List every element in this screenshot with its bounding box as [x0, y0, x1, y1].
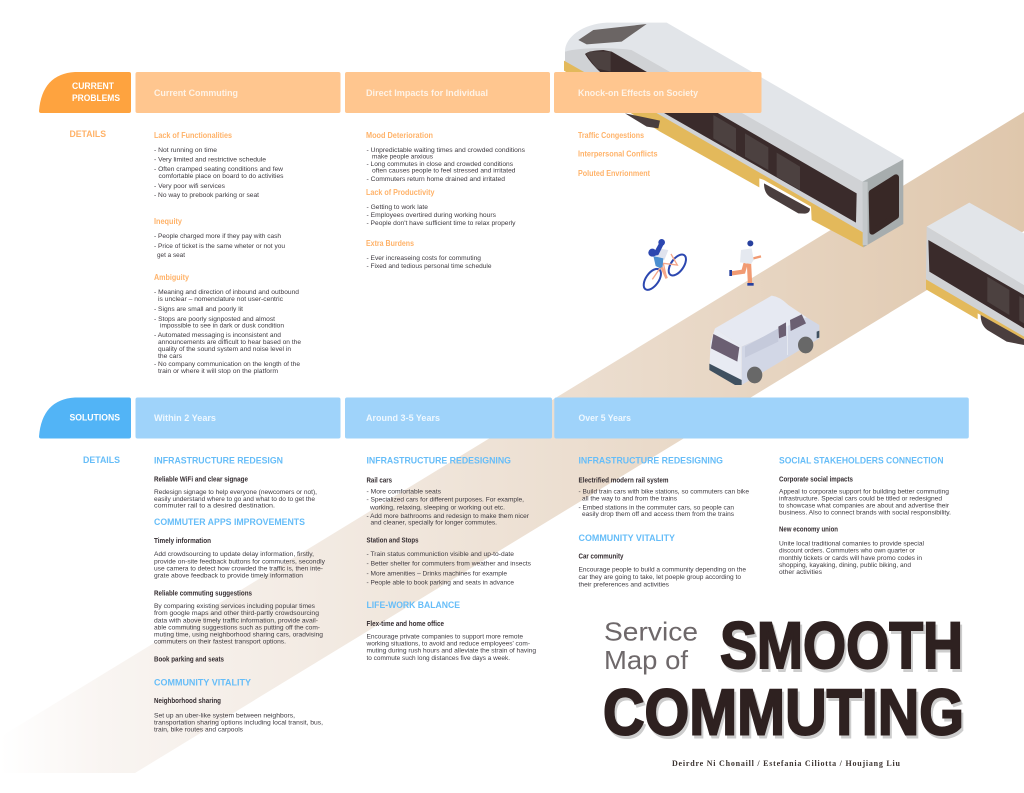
text block: around 3-5 years: - Add more bathrooms and redesign to make them nicer — [366, 513, 530, 520]
text block: within 2 years: Timely information — [154, 537, 211, 545]
text block: within 2 years: train, bike routes and carpools — [154, 727, 244, 734]
text block: current commuting details: get a seat — [157, 252, 185, 259]
text block: knock-on effects details: Poluted Envrionment — [578, 168, 650, 178]
label: details (solutions): DETAILS — [83, 455, 121, 466]
text block: within 2 years: grate above feedback to provide timely information — [154, 573, 303, 580]
text block: over 5 years, first column: their preferences and activities — [578, 581, 670, 588]
text block: over 5 years, second column: monthly tickets or cards will have promo codes in — [779, 555, 922, 562]
text block: direct impacts details: - Ever increaseing costs for commuting — [366, 255, 481, 262]
text block: over 5 years, first column: car they are going to take, let poeple group according to — [578, 574, 741, 581]
box: direct impacts: Direct Impacts for Individual — [366, 88, 488, 99]
text block: within 2 years: commuter rail to a desired destination. — [154, 503, 275, 510]
illustration: van — [709, 296, 819, 385]
text block: current commuting details: Ambiguity — [154, 272, 189, 282]
text block: around 3-5 years: Flex-time and home office — [366, 620, 444, 628]
text block: within 2 years: INFRASTRUCTURE REDESIGN — [154, 456, 283, 466]
text block: direct impacts details: Extra Burdens — [366, 238, 414, 248]
text block: within 2 years: data with above timely traffic information, provide avail- — [154, 617, 318, 624]
text block: within 2 years: By comparing existing services including popular times — [154, 603, 316, 610]
text block: current commuting details: - No company communication on the length of the — [154, 361, 300, 368]
box: within 2 years: Within 2 Years — [154, 413, 216, 424]
text block: direct impacts details: - Commuters return home drained and irritated — [366, 176, 505, 183]
box: around 3-5 years — [345, 398, 552, 438]
text block: current commuting details: - Very limited and restrictive schedule — [154, 156, 266, 164]
text block: current commuting details: - Often cramped seating conditions and few — [154, 166, 283, 173]
text block: within 2 years: able commuting suggestions such as putting off the com- — [154, 624, 320, 631]
text block: around 3-5 years: - Specialized cars for different purposes. For example, — [366, 497, 524, 504]
title: Service — [604, 617, 698, 647]
text block: direct impacts details: - Employees overtired during working hours — [366, 212, 497, 219]
text block: around 3-5 years: Encourage private companies to support more remote — [366, 634, 523, 641]
title: COMMUTING — [605, 678, 966, 752]
text block: current commuting details: - Stops are poorly signposted and almost — [154, 316, 275, 323]
text block: over 5 years, second column: to showcase what companies are about and advertise their — [779, 503, 950, 510]
text block: current commuting details: comfortable place on board to do activities — [158, 173, 284, 180]
text block: direct impacts details: often causes people to feel stressed and irritated — [372, 168, 516, 175]
text block: current commuting details: quality of the sound system and noise level in — [158, 346, 291, 353]
text block: over 5 years, first column — [578, 456, 749, 588]
text block: around 3-5 years: Station and Stops — [366, 536, 419, 544]
text block: direct impacts details: - Getting to work late — [366, 204, 428, 211]
text block: over 5 years, first column: Encourage people to build a community depending on the — [578, 567, 746, 574]
text block: within 2 years: COMMUNITY VITALITY — [154, 678, 252, 689]
box: direct impacts — [345, 72, 550, 113]
text block: within 2 years: easily understand where to go and what to do to get the — [154, 496, 315, 503]
text block: current commuting details: - People charged more if they pay with cash — [154, 233, 281, 240]
title: SMOOTH — [722, 611, 965, 685]
text block: within 2 years: COMMUTER APPS IMPROVEMENTS — [154, 517, 306, 528]
text block: knock-on effects details: Traffic Congestions — [578, 130, 644, 140]
text block: current commuting details: train or where it will stop on the platform — [158, 368, 278, 375]
text block: within 2 years: from google maps and other third-partly crowdsourcing — [154, 610, 319, 617]
text block: over 5 years, second column: discount orders. Commuters who own quarter or — [779, 548, 916, 555]
text block: around 3-5 years: working, relaxing, sleeping or working out etc. — [369, 504, 505, 511]
text block: current commuting details: - No way to prebook parking or seat — [154, 192, 259, 199]
box: current commuting — [136, 72, 340, 113]
tab: current problems: CURRENT — [72, 81, 114, 92]
title: COMMUTING — [603, 676, 964, 748]
text block: within 2 years: Redesign signage to help everyone (newcomers or not), — [154, 489, 317, 496]
tab: solutions: SOLUTIONS — [70, 413, 121, 424]
text block: current commuting details: the cars — [158, 353, 183, 360]
text block: over 5 years, second column: other activities — [779, 569, 823, 576]
box: within 2 years — [136, 398, 340, 438]
title: Map of — [604, 645, 689, 675]
text block: over 5 years, second column: shopping, kayaking, dining, public biking, and — [779, 562, 911, 569]
title — [603, 608, 966, 752]
text block: around 3-5 years: Rail cars — [366, 476, 392, 484]
text block: over 5 years, first column: COMMUNITY VITALITY — [578, 533, 676, 544]
text block: current commuting details: Lack of Functionalities — [154, 130, 232, 140]
text block: within 2 years: muting time, using neighborhood sharing cars, oradvising — [154, 631, 323, 638]
text block: within 2 years: use camera to detect how crowded the traffic is, then inte- — [154, 565, 323, 572]
text block: knock-on effects details — [578, 130, 658, 178]
text block: current commuting details: announcements are difficult to hear based on the — [158, 339, 301, 346]
text block: over 5 years, second column: infrastructure. Special cars could be titled or redesigned — [779, 496, 942, 503]
text block: current commuting details: impossible to see in dark or dusk condition — [160, 322, 284, 330]
text block: direct impacts details: - People don't have sufficient time to relax properly — [366, 220, 516, 227]
text block: over 5 years, second column: Unite local traditional comanies to provide special — [779, 541, 924, 548]
box: knock-on effects: Knock-on Effects on Society — [578, 88, 699, 99]
text block: over 5 years, first column: easily drop them off and access them from the trains — [582, 511, 735, 518]
text block: current commuting details: - Automated messaging is inconsistent and — [154, 332, 281, 339]
text block: over 5 years, first column: - Embed stations in the commuter cars, so people can — [578, 504, 734, 511]
text block: within 2 years: commuters on their fastest transport options. — [154, 639, 286, 646]
text block: around 3-5 years: - More amenities – Drinks machines for example — [366, 570, 507, 577]
text block: around 3-5 years: and cleaner, specially for longer commutes. — [370, 520, 497, 527]
illustration: cyclist — [640, 239, 689, 293]
text block: over 5 years, second column: New economy union — [779, 525, 838, 533]
illustration: front train — [564, 23, 903, 247]
box: around 3-5 years: Around 3-5 Years — [366, 413, 440, 424]
text block: within 2 years: provide on-site feedback buttons for commuters, secondly — [154, 558, 326, 565]
text block: current commuting details: - Not running on time — [154, 147, 217, 154]
illustration: runner — [729, 240, 761, 286]
illustration: rear train — [926, 203, 1024, 345]
text block: over 5 years, first column: all the way to and from the trains — [582, 495, 678, 502]
text block: within 2 years: Neighborhood sharing — [154, 697, 221, 705]
box: knock-on effects — [554, 72, 762, 113]
text block: within 2 years — [154, 456, 326, 734]
text block: current commuting details: - Price of ticket is the same wheter or not you — [154, 243, 285, 250]
text block: current commuting details: - Signs are small and poorly lit — [154, 306, 243, 313]
text block: over 5 years, first column: INFRASTRUCTURE REDESIGNING — [578, 456, 723, 466]
header row: current problems — [39, 72, 762, 113]
tab: solutions — [39, 398, 131, 438]
text block: within 2 years: Book parking and seats — [154, 655, 224, 663]
text block: direct impacts details — [366, 130, 526, 270]
text block: within 2 years: Reliable commuting suggestions — [154, 589, 252, 597]
text block: around 3-5 years — [366, 456, 536, 662]
title: SMOOTH — [720, 608, 963, 682]
text block: over 5 years, second column: Appeal to corporate support for building better commuting — [779, 489, 949, 496]
text block: over 5 years, second column: Corporate social impacts — [779, 476, 853, 484]
text block: over 5 years, second column: business. Also to connect brands with social responsibility. — [779, 510, 951, 517]
text block: around 3-5 years: to commute such long distances five days a week. — [366, 655, 510, 662]
box: over 5 years — [554, 398, 969, 438]
text block: over 5 years, second column — [779, 456, 951, 576]
text block: within 2 years: Add crowdsourcing to update delay information, firstly, — [154, 551, 314, 558]
box: current commuting: Current Commuting — [154, 88, 238, 99]
text block: around 3-5 years: INFRASTRUCTURE REDESIGNING — [366, 456, 511, 466]
text block: over 5 years, first column: Electrified modern rail system — [578, 476, 668, 484]
text block: current commuting details: - Meaning and direction of inbound and outbound — [154, 289, 299, 296]
text block: direct impacts details: - Long commutes in close and crowded conditions — [366, 161, 514, 168]
text block: around 3-5 years: - Train status communiction visible and up-to-date — [366, 551, 514, 558]
text block: direct impacts details: - Fixed and tedious personal time schedule — [366, 263, 492, 270]
text block: over 5 years, first column: - Build train cars with bike stations, so commuters can bike — [578, 489, 749, 496]
text block: direct impacts details: - Unpredictable waiting times and crowded conditions — [366, 147, 526, 154]
tab: current problems: PROBLEMS — [72, 93, 121, 104]
text block: around 3-5 years: muting during rush hours and alleviate the strain of having — [366, 648, 536, 655]
text block: over 5 years, second column: SOCIAL STAKEHOLDERS CONNECTION — [779, 456, 944, 466]
text block: current commuting details: is unclear – nomenclature not user-centric — [158, 296, 284, 303]
text block: within 2 years: Set up an uber-like system between neighbors, — [154, 712, 295, 719]
text block: direct impacts details: make people anxious — [372, 154, 434, 160]
text block: around 3-5 years: - People able to book parking and seats in advance — [366, 580, 514, 587]
text block: within 2 years: Reliable WiFi and clear signage — [154, 476, 248, 484]
text block: knock-on effects details: Interpersonal Conflicts — [578, 148, 658, 158]
text block: current commuting details: - Very poor wifi services — [154, 183, 226, 190]
text block: current commuting details: Inequity — [154, 216, 182, 226]
text block: around 3-5 years: working situations, to avoid and reduce employees' com- — [366, 641, 530, 648]
text block: over 5 years, first column: Car community — [578, 552, 624, 560]
text block: around 3-5 years: LIFE-WORK BALANCE — [366, 600, 461, 611]
text block: direct impacts details: Lack of Productivity — [366, 187, 435, 197]
header row: solutions — [39, 398, 969, 438]
text block: around 3-5 years: - Better shelter for commuters from weather and insects — [366, 561, 532, 568]
text block: within 2 years: transportation sharing options including local transit, bus, — [154, 719, 323, 726]
text block: current commuting details — [154, 130, 301, 375]
label: details (problems): DETAILS — [70, 129, 107, 140]
authors: Deirdre Ni Chonaill / Estefania Ciliotta / Houjiang Liu — [672, 759, 901, 768]
box: over 5 years: Over 5 Years — [578, 413, 631, 424]
text block: around 3-5 years: - More comfortable seats — [366, 489, 442, 496]
text block: direct impacts details: Mood Deterioration — [366, 130, 433, 140]
tab: current problems — [39, 72, 131, 113]
